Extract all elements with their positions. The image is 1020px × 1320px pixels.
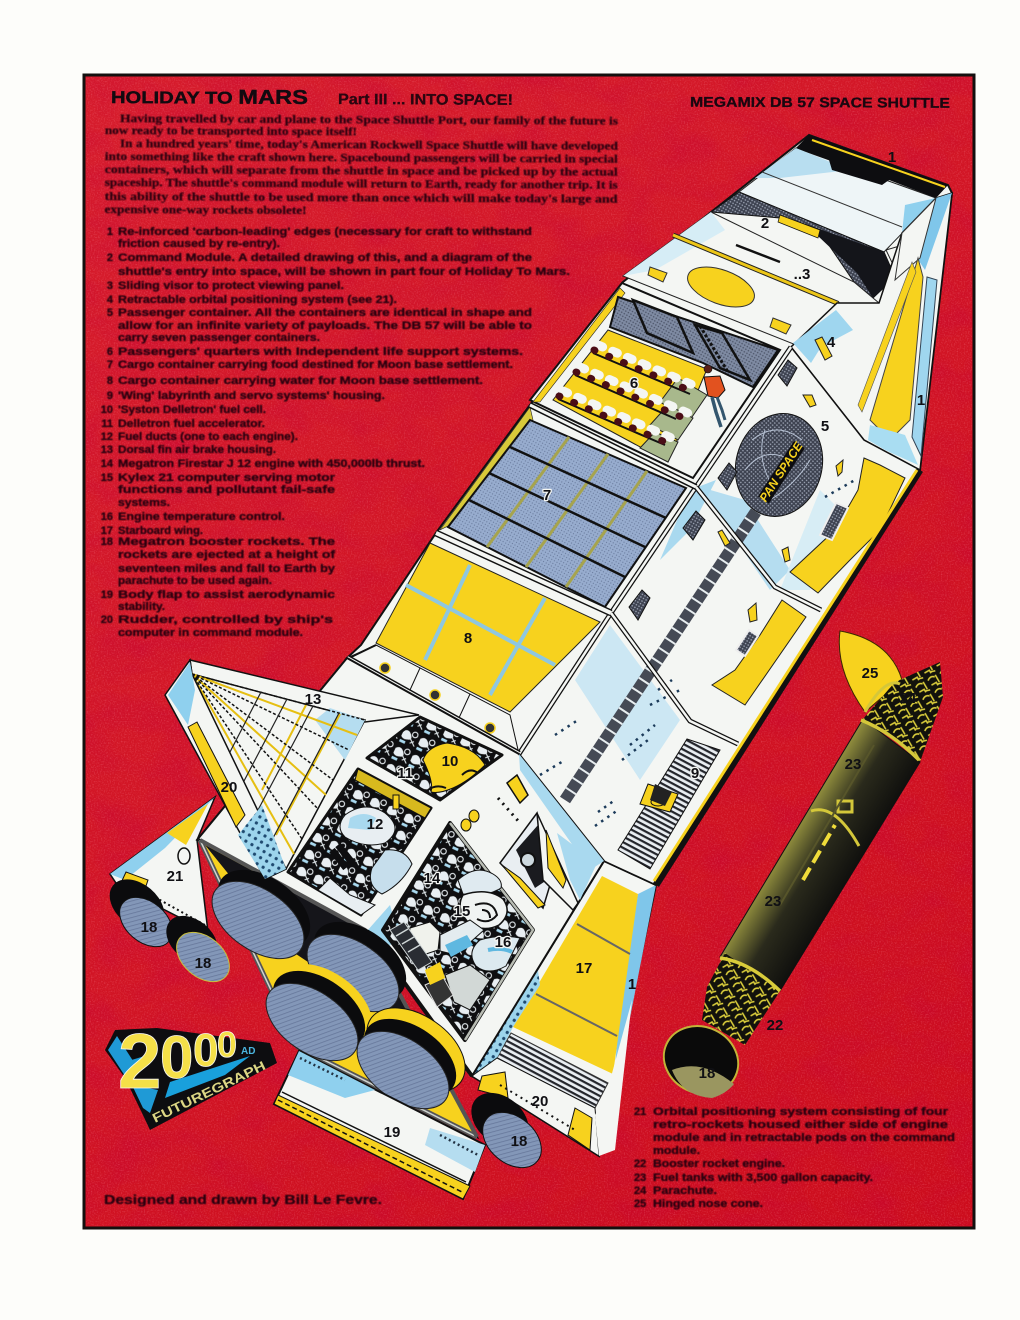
diagram number callouts: 20	[532, 1093, 548, 1110]
diagram number callouts: 18	[195, 955, 211, 972]
numbered key 21 to 25: 21	[634, 1106, 646, 1118]
numbered key 1 to 20: Retractable orbital positioning system (see 21).	[118, 294, 397, 306]
diagram number callouts: 18	[699, 1065, 715, 1082]
cargo container section: food	[436, 405, 696, 613]
numbered key 21 to 25: 24	[634, 1185, 647, 1197]
numbered key 1 to 20: Megatron booster rockets. The	[118, 536, 335, 548]
introduction text: now ready to be transported into space itself!	[105, 123, 357, 138]
diagram number callouts: 18	[511, 1133, 527, 1150]
diagram number callouts: 9	[691, 765, 699, 782]
numbered key 1 to 20: 20	[101, 614, 113, 626]
pan space passenger hatch	[724, 404, 834, 526]
small yellow engine hatch	[461, 775, 528, 831]
starboard long face	[347, 347, 920, 885]
diagram number callouts: 10	[442, 753, 458, 770]
numbered key 1 to 20: 15	[101, 472, 113, 484]
diagram number callouts: 18	[141, 919, 157, 936]
port wing	[110, 797, 215, 932]
diagram number callouts: 14	[424, 870, 441, 887]
logo 2000 wordmark: 0	[217, 1024, 237, 1065]
engine back face with nozzles	[198, 840, 481, 1137]
numbered key 1 to 20: Megatron Firestar J 12 engine with 450,000lb thrust.	[118, 458, 425, 470]
numbered key 21 to 25: retro-rockets housed either side of engine	[653, 1119, 948, 1131]
diagram number callouts: 20	[221, 779, 237, 796]
wing labyrinth louvres	[618, 739, 720, 869]
diagram number callouts: 17	[576, 960, 592, 977]
model name: MEGAMIX DB 57 SPACE SHUTTLE	[690, 94, 950, 111]
numbered key 1 to 20: 8	[107, 375, 113, 387]
nose leading edge	[796, 135, 948, 198]
numbered key 1 to 20: 5	[107, 307, 113, 319]
numbered key 21 to 25: Hinged nose cone.	[653, 1198, 763, 1210]
port booster one	[100, 869, 182, 957]
diagram number callouts: 4	[827, 334, 836, 351]
trailing edge strip	[472, 1058, 599, 1156]
numbered key 1 to 20: 4	[107, 294, 114, 306]
fuel cell window	[367, 717, 502, 800]
numbered key 1 to 20	[101, 226, 570, 639]
shuttle main body	[345, 135, 952, 885]
artist credit: Designed and drawn by Bill Le Fevre.	[104, 1193, 382, 1207]
numbered key 21 to 25	[634, 1106, 955, 1210]
numbered key 1 to 20: 6	[107, 346, 113, 358]
port booster two	[157, 906, 239, 992]
numbered key 1 to 20: 16	[101, 511, 113, 523]
rocket parachute nose	[861, 662, 943, 762]
numbered key 1 to 20: computer in command module.	[118, 627, 303, 639]
air brake top band	[190, 660, 419, 722]
numbered key 1 to 20: rockets are ejected at a height of	[118, 549, 335, 561]
numbered key 1 to 20: 9	[107, 390, 113, 402]
numbered key 21 to 25: 22	[634, 1158, 646, 1170]
diagram number callouts: 7	[543, 487, 551, 504]
cargo container section: water	[376, 543, 600, 712]
retro rocket hatch	[500, 813, 597, 910]
2000 AD Futuregraph logo	[105, 1017, 277, 1130]
diagram number callouts: 19	[384, 1124, 400, 1141]
introduction text: expensive one-way rockets obsolete!	[104, 202, 307, 217]
numbered key 21 to 25: Parachute.	[653, 1185, 717, 1197]
nozzle four	[343, 991, 481, 1124]
lower nose face with sliding visor	[623, 212, 879, 345]
section dividers	[347, 347, 821, 754]
body flap	[274, 1051, 485, 1199]
numbered key 1 to 20: 13	[101, 444, 113, 456]
red panel with black border	[84, 75, 974, 1228]
diagram number callouts: 1	[917, 392, 925, 409]
numbered key 1 to 20: Dorsal fin air brake housing.	[118, 444, 276, 456]
numbered key 1 to 20: 'Wing' labyrinth and servo systems' housing.	[118, 390, 385, 402]
numbered key 1 to 20: 3	[107, 280, 113, 292]
numbered key 1 to 20: shuttle's entry into space, will be shown in part four of Holiday To Mars.	[118, 266, 570, 278]
diagram number callouts: 6	[630, 375, 638, 392]
numbered key 21 to 25: Orbital positioning system consisting of four	[653, 1106, 949, 1118]
numbered key 21 to 25: module.	[653, 1145, 700, 1157]
introduction text	[104, 111, 619, 219]
pan space passenger hatch: PAN SPACE	[757, 439, 806, 504]
diagram number callouts: 22	[767, 1017, 783, 1034]
fin grid	[192, 674, 365, 879]
numbered key 1 to 20: 19	[101, 589, 113, 601]
numbered key 21 to 25: Fuel tanks with 3,500 gallon capacity.	[653, 1172, 873, 1184]
title: HOLIDAY TO MARS	[111, 86, 308, 109]
booster nozzle	[653, 1014, 749, 1106]
diagram number callouts: ..3	[794, 266, 810, 283]
numbered key 1 to 20: Cargo container carrying food destined for Moon base settlement.	[118, 359, 513, 371]
numbered key 1 to 20: stability.	[118, 601, 165, 613]
separated booster rocket	[653, 631, 943, 1106]
numbered key 21 to 25: 23	[634, 1172, 646, 1184]
diagram number callouts: 23	[765, 893, 781, 910]
numbered key 1 to 20: carry seven passenger containers.	[118, 332, 320, 344]
diagram number callouts	[141, 149, 925, 1150]
numbered key 1 to 20: 7	[107, 359, 113, 371]
yellow side stripe	[533, 288, 625, 402]
introduction text: Having travelled by car and plane to the Space Shuttle Port, our family of the future is	[120, 111, 618, 128]
numbered key 1 to 20: systems.	[118, 497, 170, 509]
wing louvres	[497, 1033, 608, 1108]
machinery strip below cargo	[345, 645, 519, 754]
introduction text: this ability of the shuttle to be used more than once which will make today's large and	[105, 189, 618, 206]
nozzle three	[252, 947, 387, 1076]
starboard wing	[462, 861, 656, 1156]
numbered key 1 to 20: Kylex 21 computer serving motor	[118, 472, 336, 484]
starboard nose panel with positioning pod	[791, 193, 952, 470]
introduction text: spaceship. The shuttle's command module will return to Earth, ready for another trip. It is	[105, 175, 618, 192]
logo AD mark: AD	[241, 1046, 255, 1057]
numbered key 1 to 20: Delletron fuel accelerator.	[118, 418, 265, 430]
diagram number callouts: 11	[397, 765, 413, 782]
central hatched strip	[565, 510, 757, 800]
numbered key 1 to 20: Passengers' quarters with Independent life support systems.	[118, 346, 523, 358]
logo 2000 wordmark: 0	[193, 1024, 219, 1076]
dotted blue engine edge	[462, 935, 540, 1076]
numbered key 1 to 20: 18	[101, 536, 113, 548]
hinged nose cone	[839, 631, 902, 712]
numbered key 1 to 20: allow for an infinite variety of payloads. The DB 57 will be able to	[118, 320, 532, 332]
numbered key 1 to 20: functions and pollutant fail-safe	[118, 484, 335, 496]
engine bay window	[383, 823, 533, 1040]
booster tank body	[720, 719, 920, 991]
numbered key 1 to 20: Rudder, controlled by ship's	[118, 614, 333, 626]
diagram number callouts: 5	[821, 418, 829, 435]
port wing and booster rockets	[100, 797, 239, 992]
passenger container section	[530, 283, 780, 478]
small hatches	[629, 360, 843, 622]
outer yellow edge	[656, 470, 920, 885]
logo 2000 wordmark: 2	[118, 1017, 161, 1105]
logo 2000 wordmark: 0	[160, 1024, 193, 1091]
upper nose face	[739, 148, 936, 252]
introduction text: In a hundred years' time, today's American Rockwell Space Shuttle will have developed	[120, 136, 618, 153]
heading bar	[111, 86, 950, 112]
numbered key 1 to 20: 17	[101, 525, 113, 537]
numbered key 1 to 20: Fuel ducts (one to each engine).	[118, 431, 298, 443]
numbered key 21 to 25: Booster rocket engine.	[653, 1158, 785, 1170]
tank details	[780, 745, 874, 905]
servo hatch	[640, 784, 678, 812]
numbered key 1 to 20: Sliding visor to protect viewing panel.	[118, 280, 344, 292]
numbered key 1 to 20: 11	[101, 418, 113, 430]
numbered key 1 to 20: Body flap to assist aerodynamic	[118, 589, 335, 601]
yellow starboard panel upper	[790, 458, 905, 593]
fuel ducts window	[288, 769, 431, 915]
grey viewing panels	[610, 297, 778, 387]
diagram number callouts: 12	[367, 816, 383, 833]
yellow starboard panel middle	[712, 600, 806, 705]
numbered key 1 to 20: Engine temperature control.	[118, 511, 285, 523]
diagram number callouts: 16	[495, 934, 511, 951]
rudder	[165, 660, 286, 879]
numbered key 1 to 20: 10	[101, 404, 113, 416]
diagram number callouts: 8	[464, 630, 472, 647]
numbered key 1 to 20: Cargo container carrying water for Moon base settlement.	[118, 375, 483, 387]
numbered key 1 to 20: 12	[101, 431, 113, 443]
numbered key 1 to 20: Passenger container. All the containers are identical in shape and	[118, 307, 532, 319]
numbered key 1 to 20: friction caused by re-entry).	[118, 238, 280, 250]
numbered key 1 to 20: Starboard wing.	[118, 525, 203, 537]
command module visor: 50	[894, 259, 901, 265]
yellow wing panels	[513, 876, 638, 1074]
logo futuregraph band: FUTUREGRAPH	[150, 1058, 268, 1126]
diagram number callouts: 1	[888, 149, 896, 166]
starboard booster rocket	[461, 1082, 552, 1179]
passenger rows	[553, 330, 707, 462]
dorsal fin and rudder	[165, 660, 419, 879]
introduction text: containers, which will separate from the shuttle in space and be picked up by the actual	[105, 162, 619, 179]
numbered key 1 to 20: 14	[101, 458, 114, 470]
figure walking in aisle	[704, 365, 725, 427]
numbered key 1 to 20: 1	[107, 226, 113, 238]
numbered key 1 to 20: Re-inforced 'carbon-leading' edges (necessary for craft to withstand	[118, 226, 532, 238]
numbered key 1 to 20: Command Module. A detailed drawing of this, and a diagram of the	[118, 252, 532, 264]
diagram number callouts: 24	[900, 690, 917, 707]
nozzle one	[198, 854, 324, 974]
dot groups	[540, 480, 855, 826]
numbered key 1 to 20: parachute to be used again.	[118, 575, 272, 587]
subtitle: Part III ... INTO SPACE!	[338, 91, 513, 109]
numbered key 1 to 20: seventeen miles and fall to Earth by	[118, 563, 336, 575]
diagram number callouts: 2	[761, 215, 769, 232]
numbered key 1 to 20: 'Syston Delletron' fuel cell.	[118, 404, 266, 416]
numbered key 21 to 25: 25	[634, 1198, 646, 1210]
nozzle two	[293, 906, 420, 1027]
diagram number callouts: 15	[454, 903, 470, 920]
command module visor	[711, 192, 914, 298]
numbered key 21 to 25: module and in retractable pods on the command	[653, 1132, 955, 1144]
diagram number callouts: 13	[305, 691, 321, 708]
diagram number callouts: 23	[845, 756, 861, 773]
booster engine section	[702, 953, 780, 1045]
diagram number callouts: 21	[167, 868, 183, 885]
engine module	[197, 658, 604, 1076]
numbered key 1 to 20: 2	[107, 252, 113, 264]
introduction text: into something like the craft shown here. Spacebound passengers will be carried in special	[105, 149, 619, 166]
diagram number callouts: 25	[862, 665, 878, 682]
diagram number callouts: 1	[628, 976, 636, 993]
